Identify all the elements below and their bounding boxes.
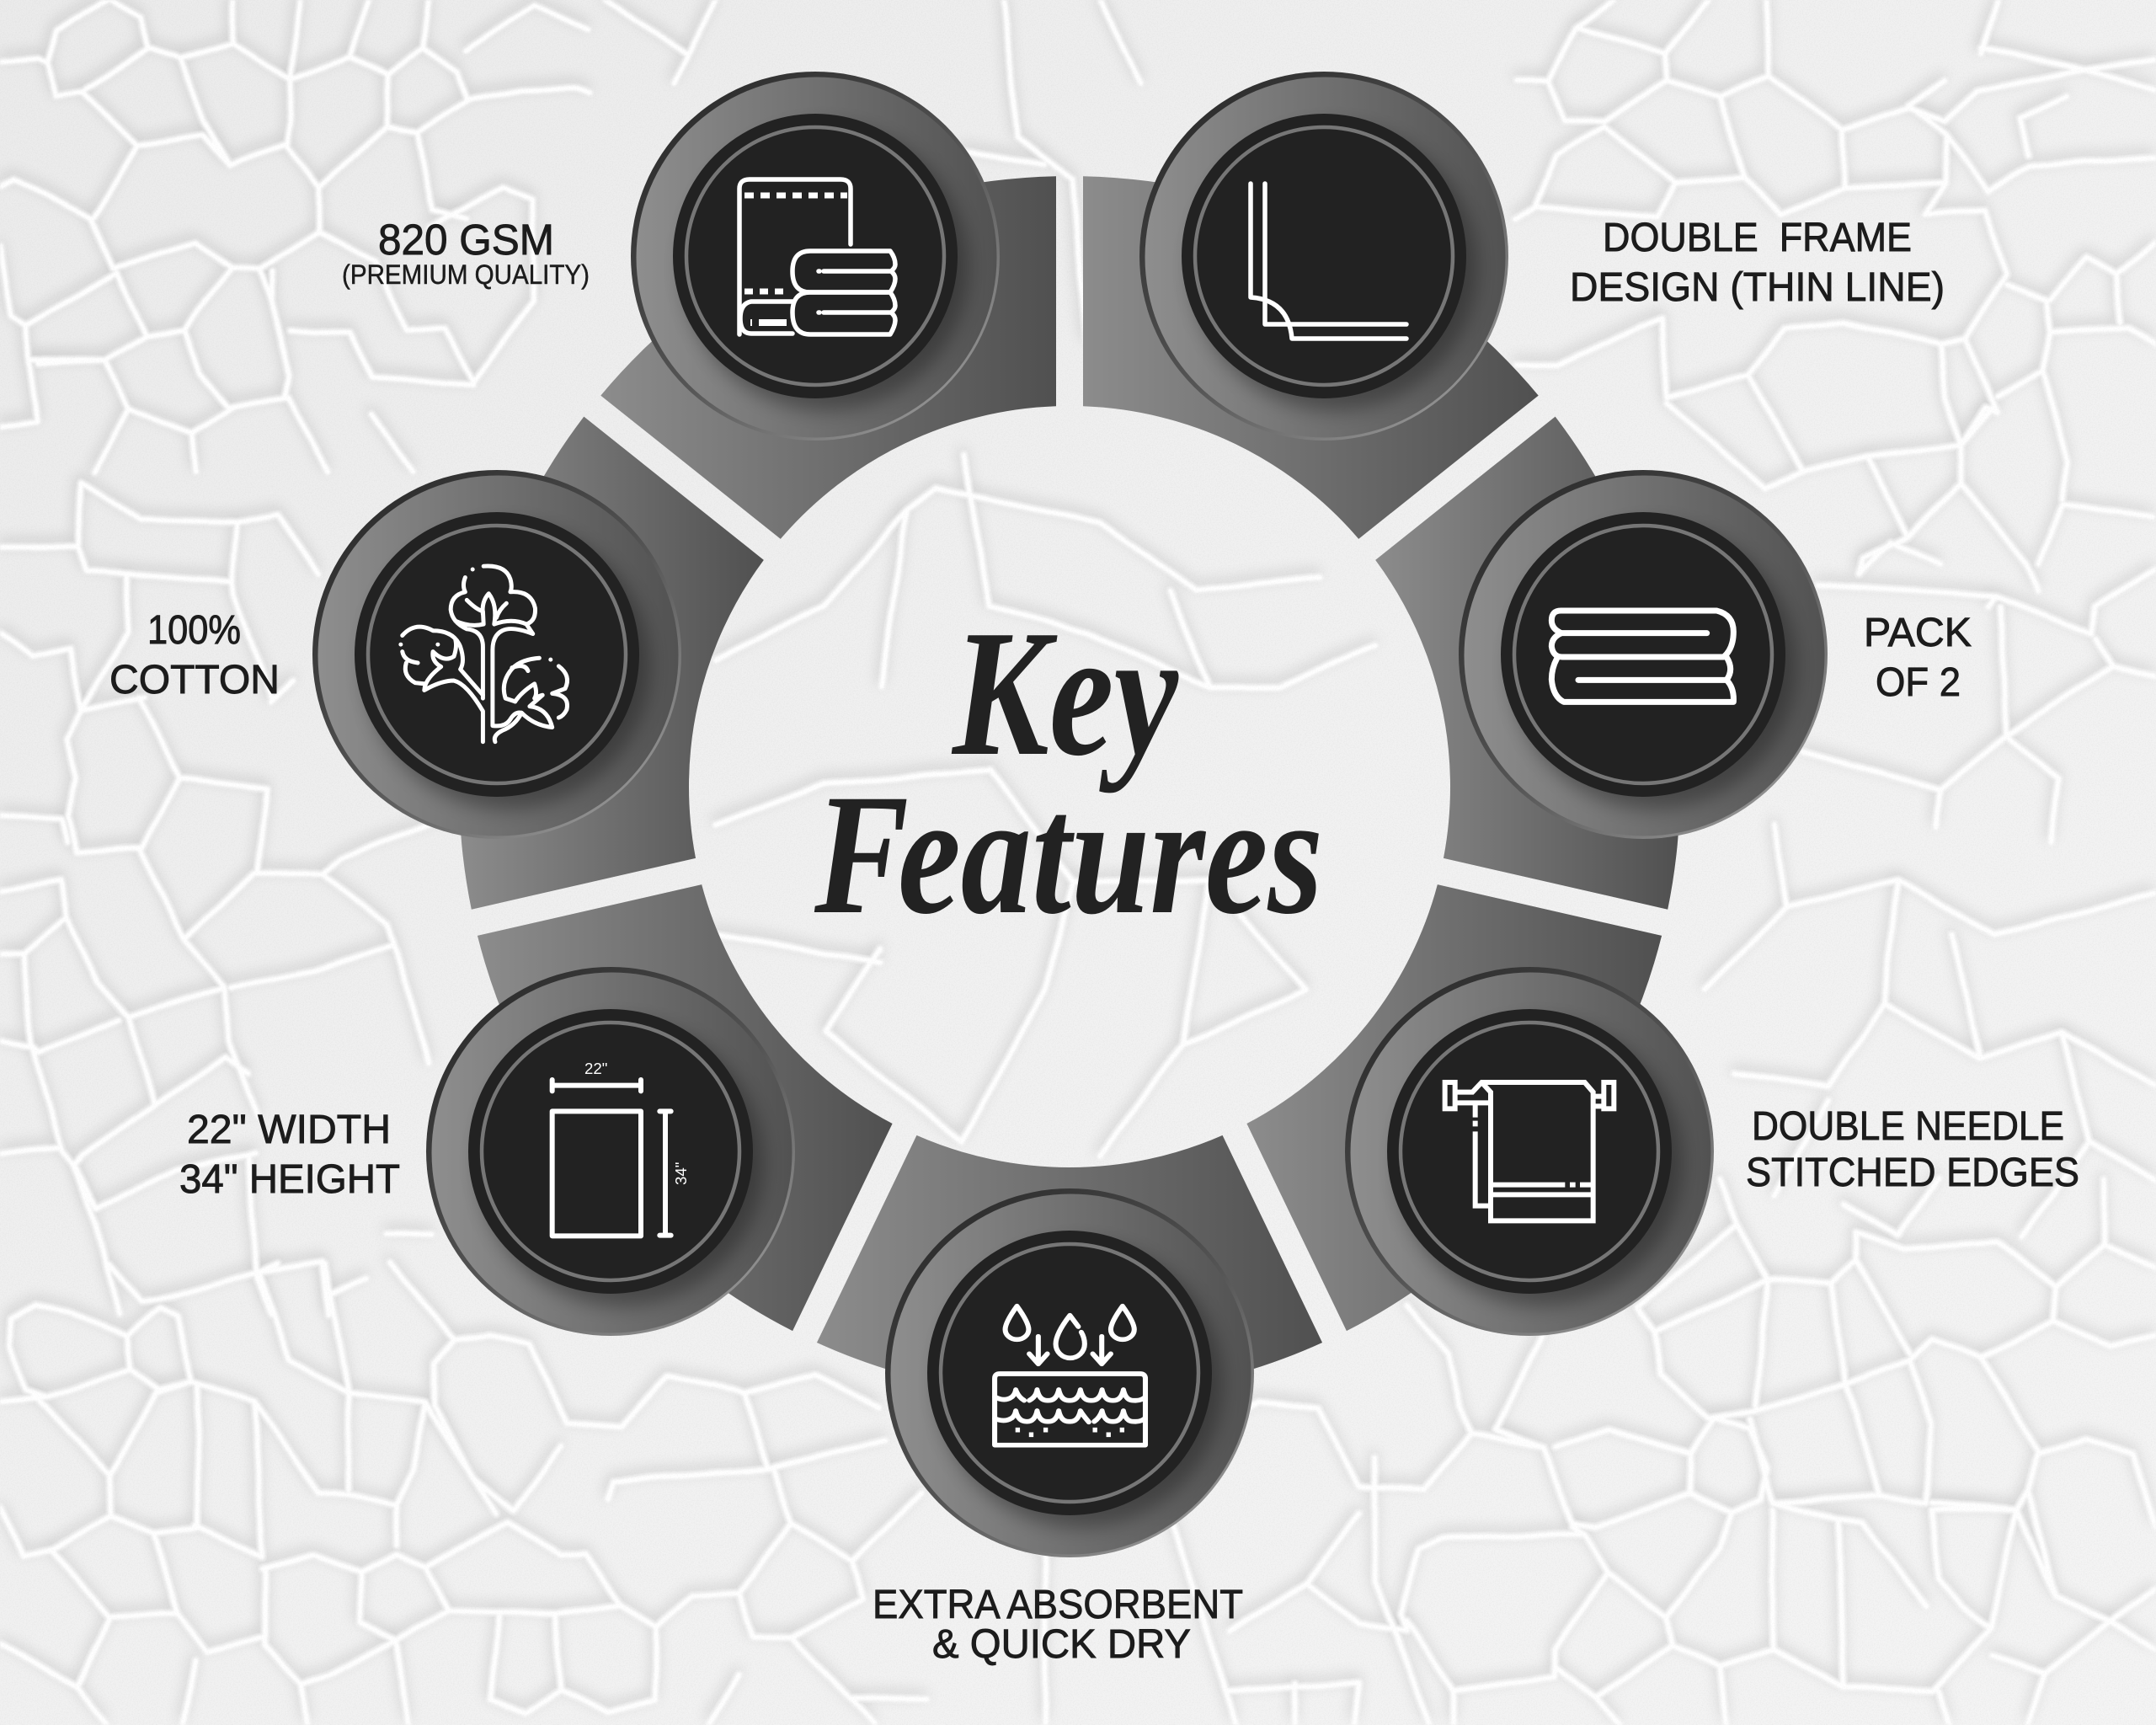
segment: double frame: [1083, 176, 1539, 539]
segment: size: [478, 884, 893, 1331]
heading: Key Features: Key: [951, 592, 1179, 793]
label: extra absorbent quick dry: [873, 1583, 1243, 1667]
icon: folded towels: [1551, 611, 1733, 702]
feature: cotton badge: [312, 470, 681, 839]
icon: water drops on fabric: [995, 1306, 1145, 1445]
ring segments: [459, 176, 1680, 1397]
icon: towel dimensions: 34": [672, 1162, 690, 1185]
label: extra absorbent quick dry: EXTRA ABSORBENT: [873, 1583, 1243, 1627]
label: 100% cotton: COTTON: [109, 658, 280, 702]
label: double needle stitched edges: DOUBLE NEEDLE: [1752, 1104, 2064, 1149]
label: width and height: 34" HEIGHT: [179, 1157, 400, 1202]
segment: pack of 2: [1375, 417, 1680, 910]
segment: stitched edges: [1246, 884, 1662, 1331]
label: double frame design: [1570, 216, 1945, 310]
label: 820 GSM: (PREMIUM QUALITY): [342, 259, 590, 290]
label: 820 GSM: 820 GSM: [378, 216, 554, 264]
label: width and height: 22" WIDTH: [187, 1108, 391, 1152]
icon: towel dimensions: [552, 1060, 690, 1236]
label: double frame design: DESIGN (THIN LINE): [1570, 265, 1945, 310]
icon: towel dimensions: 22": [584, 1060, 607, 1077]
feature: double needle badge: [1345, 967, 1714, 1336]
label: 820 GSM: [342, 216, 590, 290]
icon: double frame corner: [1251, 184, 1406, 339]
label: width and height: [179, 1108, 400, 1202]
segment: gsm: [600, 176, 1056, 539]
feature: pack of 2 badge: [1459, 470, 1828, 839]
segment: absorbent: [817, 1135, 1322, 1397]
label: double needle stitched edges: STITCHED EDGES: [1746, 1151, 2079, 1195]
label: double frame design: DOUBLE FRAME: [1603, 216, 1912, 260]
feature: absorbent badge: [885, 1188, 1254, 1557]
feature: double frame badge: [1139, 72, 1508, 441]
label: 100% cotton: [109, 608, 280, 702]
heading: Key Features: [814, 592, 1323, 950]
icon: towel on rail: [1445, 1082, 1614, 1220]
icon: towel and stacked towels: [739, 179, 895, 334]
heading: Key Features: Features: [814, 759, 1323, 950]
label: pack of 2: PACK: [1864, 611, 1972, 655]
feature: 820 GSM badge: [631, 72, 1000, 441]
label: extra absorbent quick dry: & QUICK DRY: [932, 1622, 1191, 1667]
label: pack of 2: OF 2: [1876, 660, 1961, 705]
segment: cotton: [459, 417, 764, 910]
label: double needle stitched edges: [1746, 1104, 2079, 1195]
label: pack of 2: [1864, 611, 1972, 705]
feature: size badge: [426, 967, 795, 1336]
icon: cotton plant: [401, 566, 568, 742]
label: 100% cotton: 100%: [147, 608, 241, 653]
